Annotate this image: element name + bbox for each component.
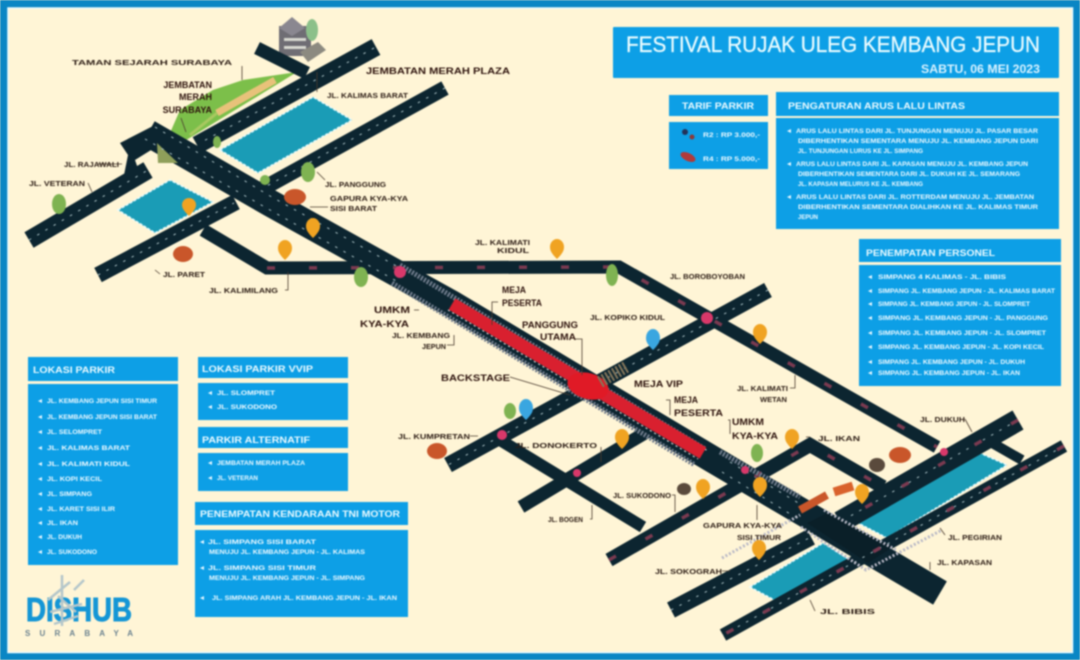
text block: parking locations: JL. KEMBANG JEPUN SISI TIMUR (47, 398, 157, 405)
logo: Dishub Surabaya: SURABAYA (25, 629, 133, 638)
street labels: JL. DONOKERTO (515, 441, 597, 450)
street labels: JL. KALIMILANG (209, 286, 278, 295)
street labels: JL. RAJAWALI (64, 160, 119, 169)
street labels: JL. KALIMATI (475, 238, 530, 247)
panel: lokasi parkir vvip (198, 357, 348, 420)
street labels: KYA-KYA (360, 319, 410, 329)
text block: parking locations: JL. SIMPANG (47, 491, 92, 498)
street labels: JL. DUKUH (920, 415, 965, 424)
street labels: MEJA (502, 285, 526, 295)
panel: pengaturan arus lalu lintas (776, 92, 1059, 229)
road markers (394, 266, 948, 477)
text block: traffic rules: ARUS LALU LINTAS DARI JL. TUNJUNGAN MENUJU JL. PASAR BESAR (796, 128, 1038, 135)
text block: traffic rules: DIBERHENTIKAN SEMENTARA MENUJU JL. KEMBANG JEPUN DARI (798, 138, 1038, 145)
street labels: JL. KUMPRETAN (398, 432, 470, 441)
title panel (613, 27, 1059, 78)
panel: lokasi parkir (28, 357, 178, 565)
street labels: JEPUN (422, 342, 446, 351)
street labels: SISI BARAT (330, 204, 377, 213)
park: Taman Sejarah Surabaya (170, 72, 297, 142)
logo: Dishub Surabaya: DISHUB (26, 591, 132, 628)
logo: Dishub Surabaya (25, 575, 133, 638)
street labels: SURABAYA (163, 105, 212, 115)
street labels: PANGGUNG (522, 320, 578, 330)
street labels: JL. VETERAN (29, 179, 85, 188)
street labels: PESERTA (674, 408, 724, 418)
street labels: GAPURA KYA-KYA (330, 194, 409, 203)
panel: tarif parkir: R2 : RP 3.000,- (703, 132, 760, 139)
street labels: MEJA VIP (634, 379, 683, 389)
panel: lokasi parkir vvip: LOKASI PARKIR VVIP (202, 364, 314, 375)
street labels: SISI TIMUR (737, 533, 782, 542)
panel: penempatan personel (859, 239, 1061, 386)
street labels: MERAH (179, 92, 212, 102)
street labels: MEJA (674, 395, 698, 405)
panel: penempatan kendaraan: JL. SIMPANG SISI BARAT (208, 539, 316, 546)
text block: parking locations: JL. KOPI KECIL (47, 476, 102, 483)
panel: parkir alternatif: PARKIR ALTERNATIF (202, 435, 310, 446)
icons: food stalls and gates (173, 189, 911, 510)
street labels: KIDUL (497, 246, 530, 255)
text block: parking locations (38, 398, 157, 556)
street labels (29, 58, 1002, 616)
text block: personnel positions: SIMPANG JL. KEMBANG JEPUN - JL. DUKUH (878, 359, 1025, 366)
text block: traffic rules (787, 128, 1038, 221)
text block: parking locations: JL. KARET SISI ILIR (47, 506, 115, 513)
icons: parking pins (182, 198, 869, 560)
street labels: BACKSTAGE (441, 373, 510, 383)
panel: tarif parkir: TARIF PARKIR (682, 101, 754, 112)
panel: penempatan kendaraan: JL. SIMPANG SISI TIMUR (208, 565, 316, 572)
icons: trees (52, 136, 763, 462)
panel: tarif parkir (669, 95, 768, 169)
street labels: JL. BIBIS (820, 607, 875, 616)
street labels: GAPURA KYA-KYA (703, 521, 783, 530)
water: teal river areas (118, 97, 1007, 602)
text block: personnel positions: SIMPANG JL. KEMBANG JEPUN - JL. SLOMPRET (878, 330, 1046, 337)
text block: personnel positions: SIMPANG 4 KALIMAS - JL. BIBIS (878, 274, 1007, 281)
panel: lokasi parkir: LOKASI PARKIR (33, 365, 115, 376)
panel: parkir alternatif (198, 427, 348, 491)
panel: lokasi parkir vvip: JL. SUKODONO (217, 404, 277, 411)
text block: parking locations: JL. SELOMPRET (47, 429, 102, 436)
text block: parking locations: JL. KALIMAS BARAT (47, 445, 130, 452)
icon: car (679, 150, 697, 164)
panel: parkir alternatif: JL. VETERAN (217, 475, 258, 482)
street labels: PESERTA (502, 298, 542, 308)
panel: parkir alternatif: JEMBATAN MERAH PLAZA (217, 460, 305, 467)
text block: personnel positions: SIMPANG JL. KEMBANG JEPUN - JL. PANGGUNG (878, 315, 1048, 322)
leader lines (88, 66, 972, 611)
text block: parking locations: JL. KALIMATI KIDUL (47, 461, 130, 468)
street labels: JL. BOROBOYOBAN (670, 272, 745, 281)
street labels: JL. PARET (163, 270, 205, 279)
street labels: JEMBATAN (163, 80, 212, 90)
red carpet festival area (452, 304, 703, 453)
street labels: JL. KAPASAN (937, 558, 992, 567)
street labels: JL. KALIMAS BARAT (327, 91, 408, 100)
title: FESTIVAL RUJAK ULEG KEMBANG JEPUN (626, 32, 1040, 57)
panel: penempatan personel: PENEMPATAN PERSONEL (866, 248, 995, 259)
panel: penempatan kendaraan: MENUJU JL. KEMBANG JEPUN - JL. KALIMAS (209, 549, 366, 556)
icons: blue pins (519, 329, 660, 420)
street labels: WETAN (760, 395, 787, 404)
street labels: JL. BOGEN (548, 515, 583, 524)
text block: parking locations: JL. KEMBANG JEPUN SISI BARAT (47, 414, 157, 421)
panel: penempatan kendaraan: PENEMPATAN KENDARAAN TNI MOTOR (200, 509, 400, 520)
street labels: JL. KALIMATI (737, 384, 788, 393)
street labels: JL. KOPIKO KIDUL (590, 313, 665, 322)
text block: traffic rules: ARUS LALU LINTAS DARI JL. ROTTERDAM MENUJU JL. JEMBATAN (796, 194, 1034, 201)
icon: motorcycle (682, 129, 694, 140)
text block: personnel positions: SIMPANG JL. KEMBANG JEPUN - JL. KALIMAS BARAT (878, 288, 1055, 295)
text block: traffic rules: JL. KAPASAN MELURUS KE JL. KEMBANG (798, 181, 923, 188)
text block: parking locations: JL. DUKUH (47, 534, 82, 541)
text block: personnel positions: SIMPANG JL. KEMBANG JEPUN - JL. SLOMPRET (878, 301, 1030, 308)
building: Jembatan Merah Plaza (279, 17, 326, 62)
street labels: JL. SOKOGRAH (655, 567, 722, 576)
panel: penempatan kendaraan: MENUJU JL. KEMBANG JEPUN - JL. SIMPANG (209, 575, 365, 582)
text block: personnel positions (868, 274, 1055, 377)
text block: personnel positions: SIMPANG JL. KEMBANG JEPUN - JL. IKAN (878, 370, 1020, 377)
text block: parking locations: JL. SUKODONO (47, 549, 97, 556)
street labels: JEMBATAN MERAH PLAZA (366, 66, 511, 76)
street labels: UMKM (374, 305, 410, 315)
panel: pengaturan arus lalu lintas: PENGATURAN ARUS LALU LINTAS (788, 101, 965, 112)
street labels: JL. IKAN (818, 434, 860, 443)
panel: penempatan kendaraan: JL. SIMPANG ARAH JL. KEMBANG JEPUN - JL. IKAN (212, 595, 397, 602)
text block: traffic rules: DIBERHENTIKAN SEMENTARA DIALIHKAN KE JL. KALIMAS TIMUR (798, 204, 1038, 211)
text block: traffic rules: JL. TUNJUNGAN LURUS KE JL. SIMPANG (798, 148, 923, 155)
text block: traffic rules: DIBERHENTIKAN SEMENTARA DARI JL. DUKUH KE JL. SEMARANG (798, 171, 1020, 178)
street labels: KYA-KYA (732, 431, 779, 441)
text block: personnel positions: SIMPANG JL. KEMBANG JEPUN - JL. KOPI KECIL (878, 344, 1044, 351)
text block: traffic rules: JEPUN (798, 214, 818, 221)
date: SABTU, 06 MEI 2023 (921, 64, 1040, 76)
street labels: JL. PANGGUNG (325, 180, 386, 189)
street labels: JL. PEGIRIAN (948, 533, 1002, 542)
panel: lokasi parkir vvip: JL. SLOMPRET (217, 390, 275, 397)
text block: traffic rules: ARUS LALU LINTAS DARI JL. KAPASAN MENUJU JL. KEMBANG JEPUN (796, 161, 1028, 168)
panel: tarif parkir: R4 : RP 5.000,- (703, 156, 760, 163)
street labels: UTAMA (540, 332, 577, 342)
street labels: JL. SUKODONO (613, 491, 671, 500)
street labels: JL. KEMBANG (392, 331, 450, 340)
street labels: UMKM (732, 417, 764, 427)
text block: parking locations: JL. IKAN (47, 520, 78, 527)
panel: penempatan kendaraan (195, 502, 408, 617)
street labels: TAMAN SEJARAH SURABAYA (72, 58, 233, 67)
